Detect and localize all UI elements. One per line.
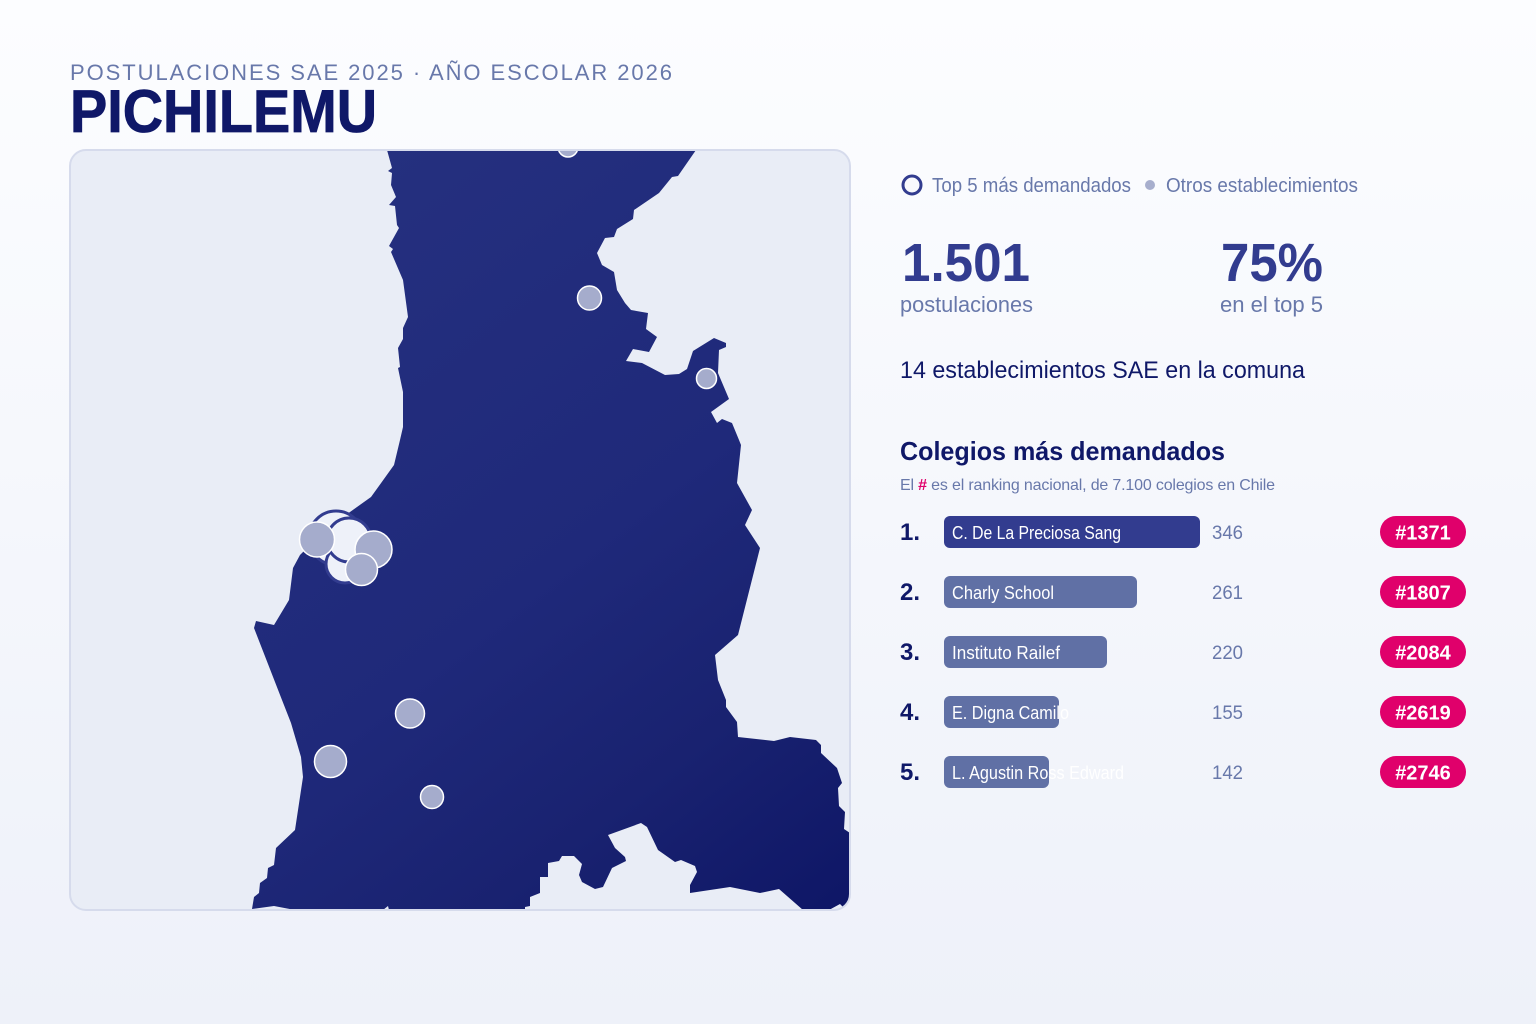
row 3 [900,636,1466,668]
icon: other dot [1145,180,1155,190]
row 1: 346 [1212,523,1243,544]
row 4: E. Digna Camilo [952,703,1069,723]
stat: applications: postulaciones [900,292,1033,317]
row 2: 261 [1212,583,1243,604]
row 2 [900,576,1466,608]
row 5: L. Agustin Ross Edward [952,763,1124,783]
row 3: #2084 [1395,642,1452,664]
markers: other schools [300,137,716,808]
subtitle: POSTULACIONES SAE 2025 · AÑO ESCOLAR 2026 [70,60,672,85]
text: school count: 14 establecimientos SAE en la comuna [900,357,1306,384]
row 2: Charly School [952,583,1054,603]
map: comuna shape [252,150,850,910]
row 2: #1807 [1395,582,1451,604]
row 4: #2619 [1395,702,1451,724]
row 1: C. De La Preciosa Sang [952,523,1121,543]
legend [903,175,1358,197]
row 4: 4. [900,699,920,726]
row 4 [900,696,1466,728]
row 3: 220 [1212,643,1243,664]
ranking heading: Colegios más demandados [900,436,1225,466]
row 5: 142 [1212,763,1243,784]
row 5: 5. [900,759,920,786]
row 4: 155 [1212,703,1243,724]
row 1: #1371 [1395,522,1451,544]
stat: top 5 share: 75% [1221,233,1323,293]
row 3: Instituto Railef [952,643,1061,663]
row 5 [900,756,1466,788]
ranking chart [900,516,1466,788]
legend label: top 5: Top 5 más demandados [932,175,1131,197]
legend label: others: Otros establecimientos [1166,175,1358,197]
row 3: 3. [900,639,920,666]
stat: applications [900,233,1033,317]
row 5: #2746 [1395,762,1451,784]
ranking note: El # es el ranking nacional, de 7.100 colegios en Chile [900,477,1275,494]
row 1 [900,516,1466,548]
row 2: 2. [900,579,920,606]
header [70,60,672,145]
stat: top 5 share [1220,233,1323,317]
panel: map [70,137,850,910]
stat: top 5 share: en el top 5 [1220,292,1323,317]
markers: top 5 schools [309,511,371,583]
stat: applications: 1.501 [902,233,1030,293]
row 1: 1. [900,519,920,546]
title: PICHILEMU [70,78,377,145]
icon: top 5 ring [903,176,921,194]
